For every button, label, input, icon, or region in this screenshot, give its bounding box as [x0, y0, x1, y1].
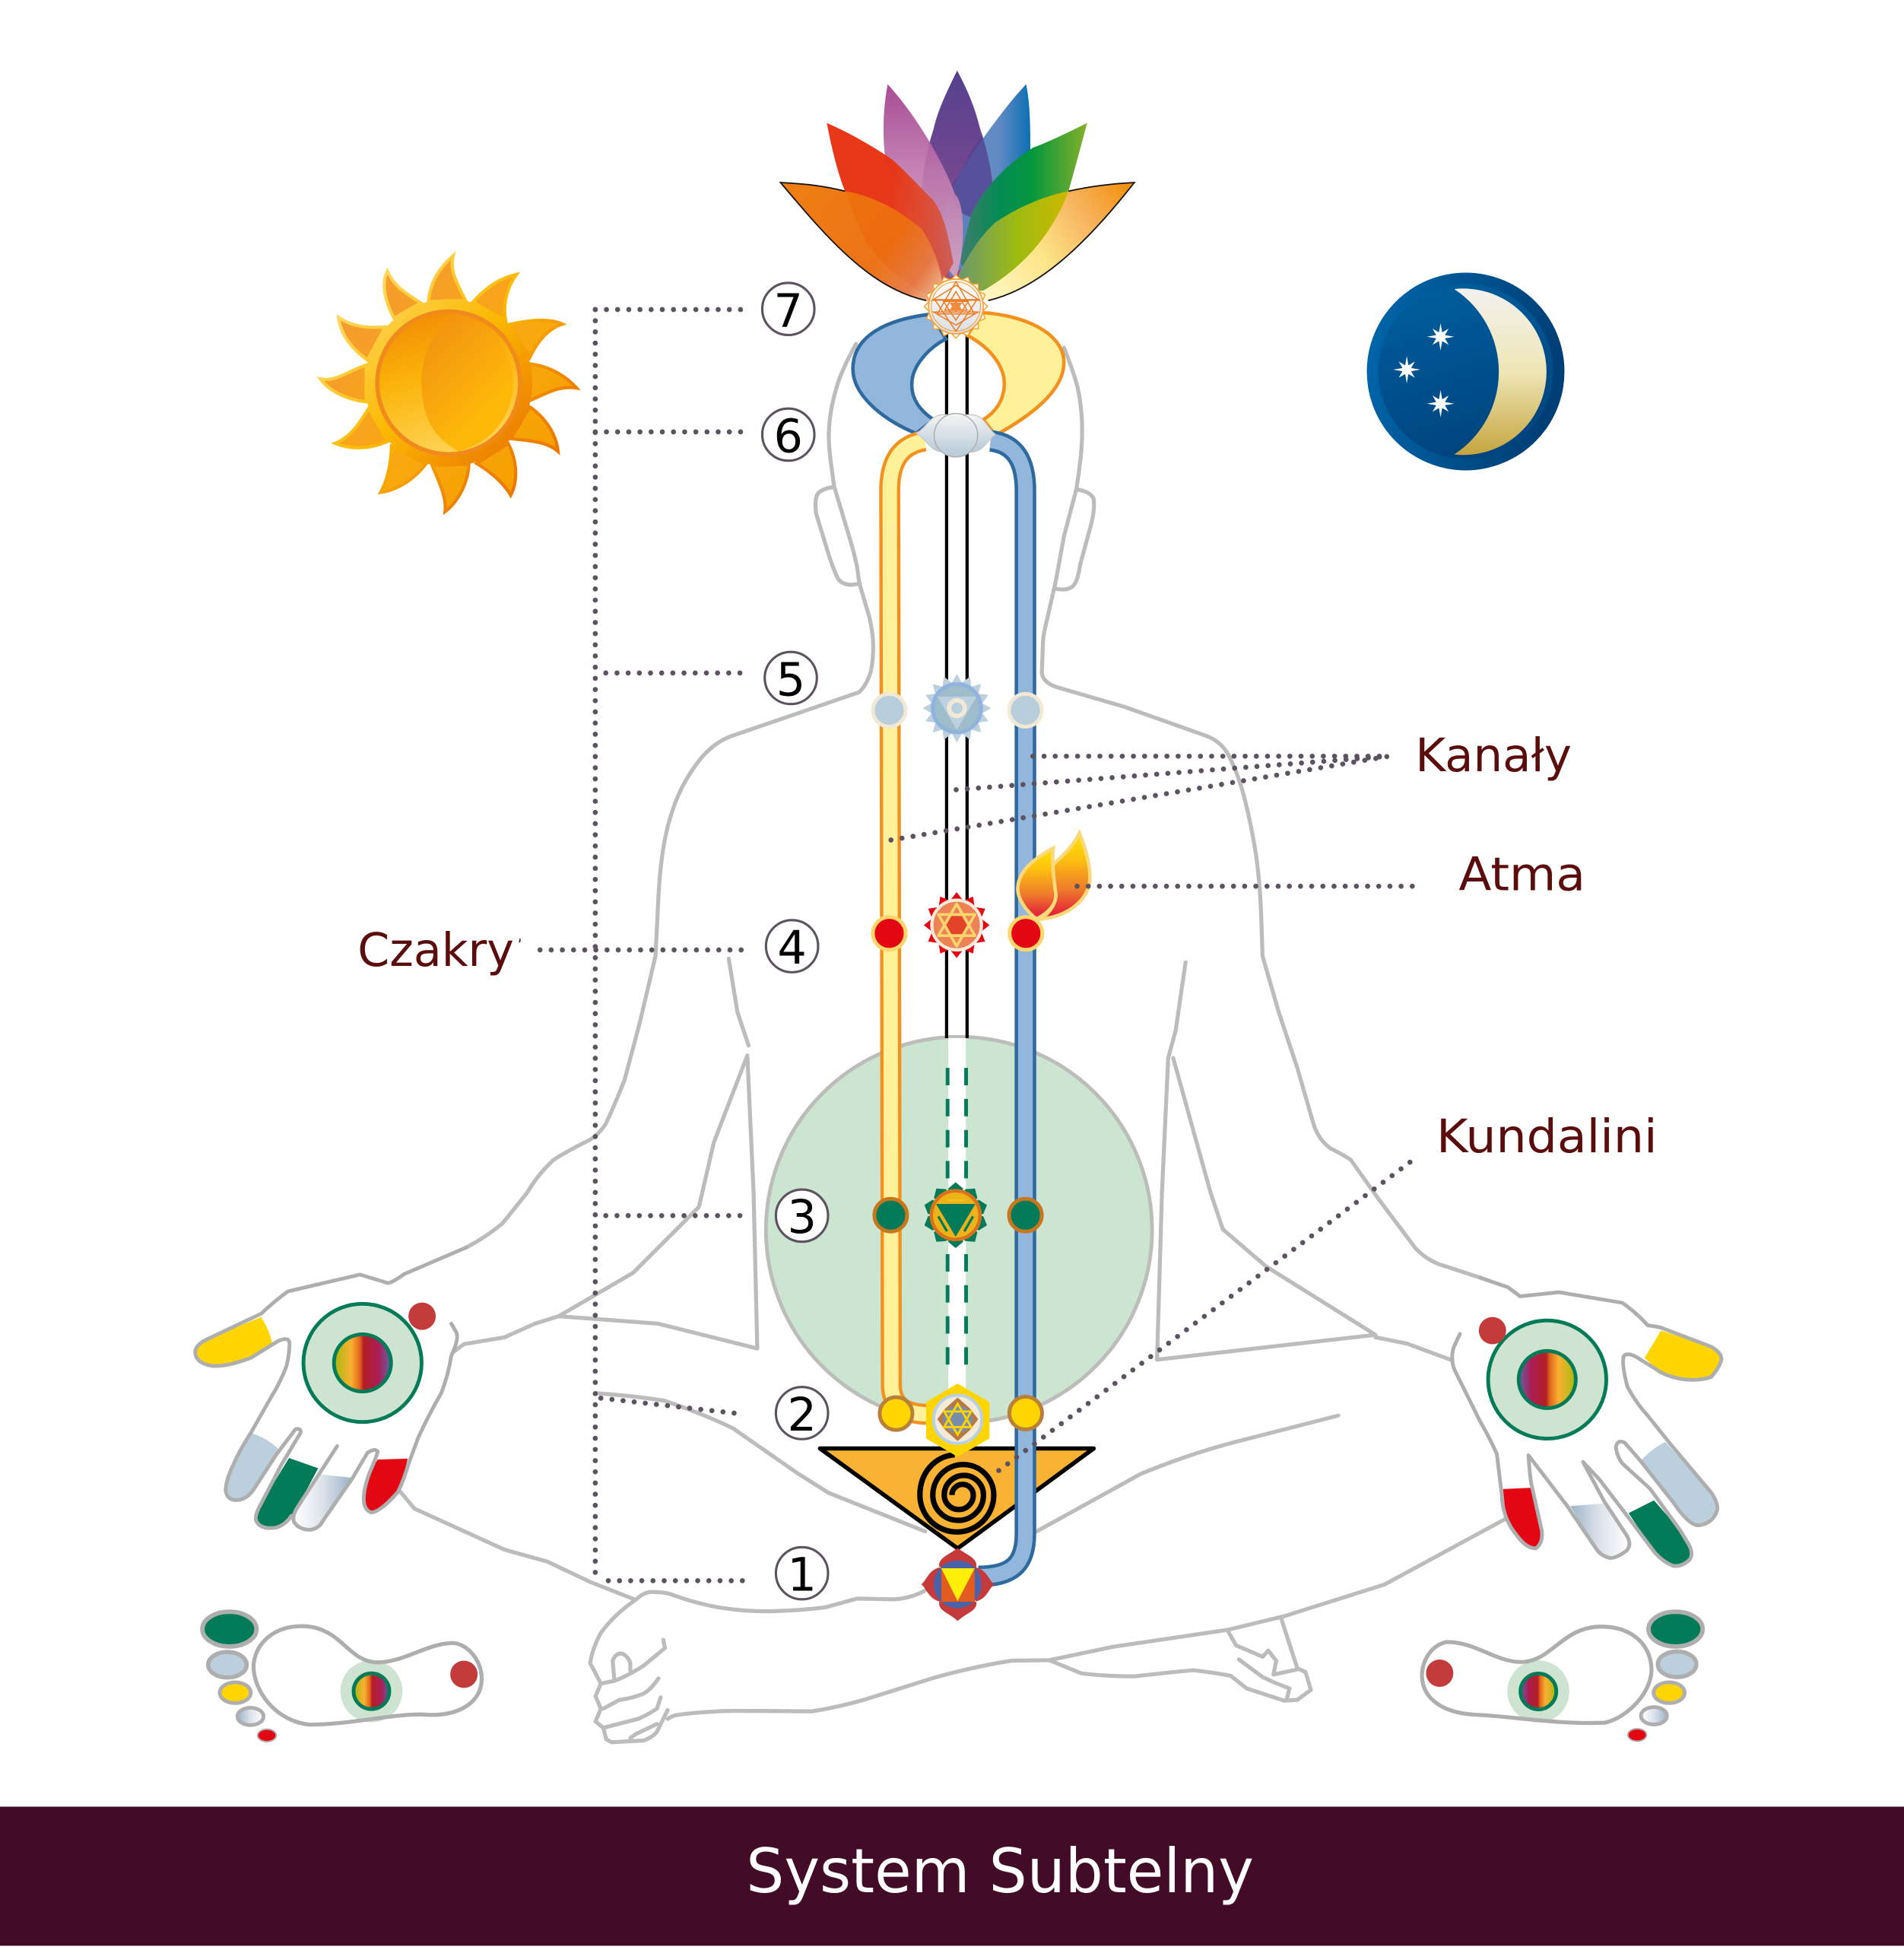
label: Czakry: Czakry	[357, 924, 514, 977]
number 7: 7	[774, 284, 803, 338]
upper blue channel	[853, 314, 946, 434]
number 3: 3	[787, 1191, 817, 1244]
left palm ring	[303, 1304, 421, 1422]
chakra 3: manipura	[922, 1182, 989, 1248]
kundalini leader line	[998, 1158, 1417, 1471]
left foot	[202, 1612, 481, 1742]
number 6: 6	[774, 410, 803, 463]
toes	[202, 1612, 276, 1742]
number 7	[762, 283, 814, 338]
lower yellow channel	[890, 441, 928, 1415]
central channel: white strip with dashed lines	[947, 326, 967, 1392]
icon: atma flame	[1017, 834, 1090, 919]
number 3	[776, 1189, 828, 1244]
energy nodes on side channels	[873, 694, 1042, 1430]
number 2: 2	[787, 1389, 817, 1442]
numbered chakra markers	[762, 283, 828, 1602]
title: System Subtelny	[746, 1836, 1254, 1907]
footer banner	[0, 1807, 1904, 1945]
stars	[1393, 323, 1454, 418]
number 4	[766, 920, 818, 975]
toes	[1628, 1612, 1702, 1741]
icon: sun	[321, 256, 576, 512]
right hand	[1452, 1278, 1722, 1566]
lotus crown	[780, 71, 1134, 302]
chakra 7: sahasrara	[924, 275, 988, 338]
right foot	[1422, 1612, 1702, 1741]
chakra 6: ajna	[916, 414, 995, 457]
kanaly leader lines	[891, 756, 1389, 840]
number 1: 1	[787, 1548, 817, 1602]
number 6	[762, 408, 814, 463]
chakra 1: muladhara	[922, 1548, 994, 1621]
chakra 5: vishuddhi	[923, 674, 991, 742]
chakra 4: anahata	[924, 892, 990, 958]
number 2	[776, 1387, 828, 1442]
number 5: 5	[776, 653, 805, 707]
number 4: 4	[777, 922, 807, 975]
number 5	[765, 652, 817, 707]
seated body outline	[401, 344, 1504, 1742]
atma leader line	[1077, 885, 1421, 888]
left hand	[195, 1247, 466, 1529]
green belly circle	[766, 1037, 1152, 1423]
moon crescent	[1454, 288, 1547, 455]
icon: moon with stars	[1367, 273, 1564, 470]
kundalini triangle	[820, 1448, 1093, 1548]
chakra 2: svadhisthana	[928, 1386, 988, 1455]
label: Kanaly: Kanały	[1415, 729, 1572, 783]
kundalini spiral	[920, 1455, 994, 1532]
label: Kundalini: Kundalini	[1436, 1110, 1658, 1164]
number 1	[776, 1547, 828, 1602]
chakra bracket dotted lines	[540, 310, 747, 1582]
right palm ring	[1488, 1320, 1606, 1439]
lower blue channel	[979, 441, 1026, 1577]
upper yellow channel	[967, 313, 1064, 435]
label: Atma: Atma	[1458, 849, 1585, 902]
